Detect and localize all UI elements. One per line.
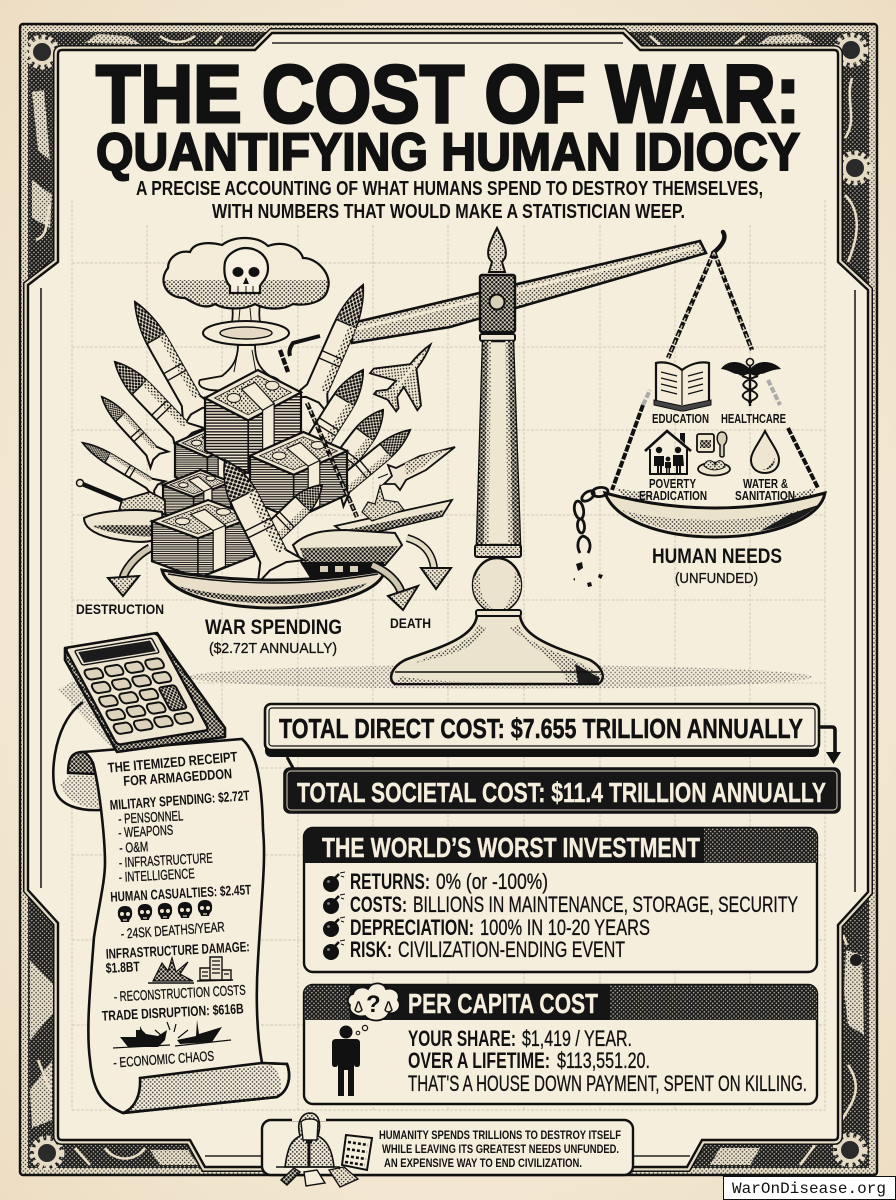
- broken chain: [573, 486, 609, 587]
- label: death: DEATH: [390, 615, 431, 631]
- receipt: military spending: - INTELLIGENCE: [118, 865, 195, 885]
- receipt scroll: [53, 702, 289, 1113]
- title: QUANTIFYING HUMAN IDIOCY: [96, 123, 800, 182]
- missiles back layer: [78, 277, 420, 506]
- label: human needs: HUMAN NEEDS: [652, 545, 782, 568]
- icon: despairing man: [276, 1113, 340, 1167]
- row: returns: [323, 869, 548, 894]
- text: your share: $1,419 / YEAR.: [522, 1026, 632, 1051]
- label: water and sanitation: SANITATION: [735, 488, 795, 503]
- label: war spending: WAR SPENDING: [205, 616, 342, 639]
- row: depreciation: [323, 915, 650, 940]
- callout text: WHILE LEAVING ITS GREATEST NEEDS UNFUNDED.: [382, 1142, 619, 1156]
- icon: thought bubble with money bags: [348, 983, 400, 1035]
- row: costs: COSTS:: [350, 892, 407, 917]
- background grid: [72, 200, 825, 1110]
- label: war spending: [205, 616, 342, 657]
- row: risk: RISK:: [350, 937, 392, 962]
- label: education: EDUCATION: [652, 411, 709, 426]
- receipt: military spending: - PENSONNEL: [118, 807, 184, 827]
- fighter jet icon: [361, 326, 454, 421]
- scale beam: [289, 232, 724, 356]
- label: human needs: (UNFUNDED): [675, 570, 758, 587]
- receipt: human casualties: [110, 881, 252, 942]
- icon: food: [697, 432, 730, 476]
- calculator and receipt: [53, 633, 289, 1113]
- icon: caduceus: [721, 358, 781, 406]
- label: poverty eradication: [639, 476, 707, 503]
- icon: abacus: [342, 1135, 372, 1170]
- front money stack and missiles: [152, 448, 335, 583]
- total direct cost box: [265, 704, 819, 757]
- arrow: direct to societal: [287, 727, 841, 768]
- base shadow: [188, 665, 812, 689]
- label: human needs: [652, 545, 782, 587]
- arrow: right side: [407, 538, 451, 589]
- label: war spending: ($2.72T ANNUALLY): [209, 640, 337, 657]
- row: depreciation: 100% IN 10-20 YEARS: [480, 915, 650, 940]
- receipt: trade disruption: TRADE DISRUPTION: $616B: [101, 1000, 244, 1024]
- header band: [304, 985, 817, 1020]
- scale pillar: [391, 228, 603, 684]
- subtitle: [136, 177, 763, 223]
- arrow: death: [372, 565, 418, 610]
- label: poverty eradication: ERADICATION: [639, 488, 707, 503]
- icon: person: [332, 1026, 360, 1096]
- receipt: military spending: - WEAPONS: [118, 822, 174, 840]
- row: returns: 0% (or -100%): [436, 869, 548, 894]
- label: water and sanitation: WATER &: [743, 476, 788, 491]
- label: healthcare: HEALTHCARE: [721, 411, 786, 426]
- row: returns: RETURNS:: [350, 869, 430, 894]
- icon: house with family: [645, 431, 691, 474]
- header band: THE WORLD’S WORST INVESTMENT: [322, 832, 700, 863]
- receipt: infrastructure damage: $1.8BT: [105, 958, 140, 976]
- receipt: military spending: - INFRASTRUCTURE: [118, 850, 213, 870]
- label: destruction: DESTRUCTION: [76, 601, 164, 617]
- row: costs: [323, 892, 798, 917]
- arrow: destruction: [108, 548, 150, 596]
- receipt heading: THE ITEMIZED RECEIPT: [107, 748, 238, 776]
- label: poverty eradication: POVERTY: [649, 476, 696, 491]
- receipt: trade disruption: [101, 1000, 244, 1071]
- text: your share: [408, 1026, 632, 1051]
- right scale chains: [612, 252, 818, 490]
- money stacks: [163, 370, 347, 525]
- receipt: military spending: MILITARY SPENDING: $2.72T: [109, 787, 250, 813]
- receipt: trade disruption: - ECONOMIC CHAOS: [113, 1048, 215, 1071]
- callout text: AN EXPENSIVE WAY TO END CIVILIZATION.: [384, 1156, 582, 1170]
- receipt: infrastructure damage: - RECONSTRUCTION COSTS: [113, 982, 246, 1004]
- title: [96, 49, 800, 182]
- panel: world's worst investment: [304, 828, 817, 972]
- right pan: human needs: [605, 488, 825, 537]
- receipt: infrastructure damage: [105, 938, 250, 1004]
- calculator: [58, 633, 225, 752]
- total societal cost box: [284, 768, 840, 813]
- row: risk: CIVILIZATION-ENDING EVENT: [398, 937, 625, 962]
- text: over a lifetime: OVER A LIFETIME:: [408, 1048, 550, 1073]
- footer callout: [262, 1113, 633, 1187]
- header band: PER CAPITA COST: [408, 988, 598, 1019]
- mushroom cloud with skull: [155, 238, 335, 390]
- receipt: military spending: - O&M: [119, 838, 149, 856]
- text: your share: YOUR SHARE:: [408, 1026, 516, 1051]
- receipt: human casualties: - 24SK DEATHS/YEAR: [120, 918, 225, 942]
- label: water and sanitation: [735, 476, 795, 503]
- row: depreciation: DEPRECIATION:: [350, 915, 474, 940]
- watermark: WarOnDisease.org: [732, 1180, 886, 1198]
- receipt heading: FOR ARMAGEDDON: [123, 765, 233, 789]
- text: over a lifetime: $113,551.20.: [557, 1048, 650, 1073]
- receipt: human casualties: HUMAN CASUALTIES: $2.45T: [110, 881, 252, 905]
- left scale chain: [280, 350, 357, 517]
- subtitle: WITH NUMBERS THAT WOULD MAKE A STATISTICIAN WEEP.: [212, 200, 685, 223]
- panel: per capita cost: [304, 983, 817, 1104]
- callout text: HUMANITY SPENDS TRILLIONS TO DESTROY ITSELF: [379, 1128, 621, 1142]
- callout text: [379, 1128, 621, 1170]
- icon: water drop: [751, 431, 779, 473]
- icon: book: [654, 362, 711, 411]
- row: risk: [323, 937, 625, 962]
- title: THE COST OF WAR:: [96, 49, 800, 140]
- small flying missile: [378, 447, 455, 490]
- receipt: military spending: [109, 787, 250, 885]
- receipt: infrastructure damage: INFRASTRUCTURE DAMAGE:: [105, 938, 250, 962]
- left pan: war spending: [162, 570, 385, 608]
- tanks and warship: [76, 480, 452, 578]
- icon: thought bubble with money bags: ?: [366, 991, 381, 1018]
- icon: scattered papers: [281, 1167, 358, 1187]
- receipt heading: [107, 748, 238, 789]
